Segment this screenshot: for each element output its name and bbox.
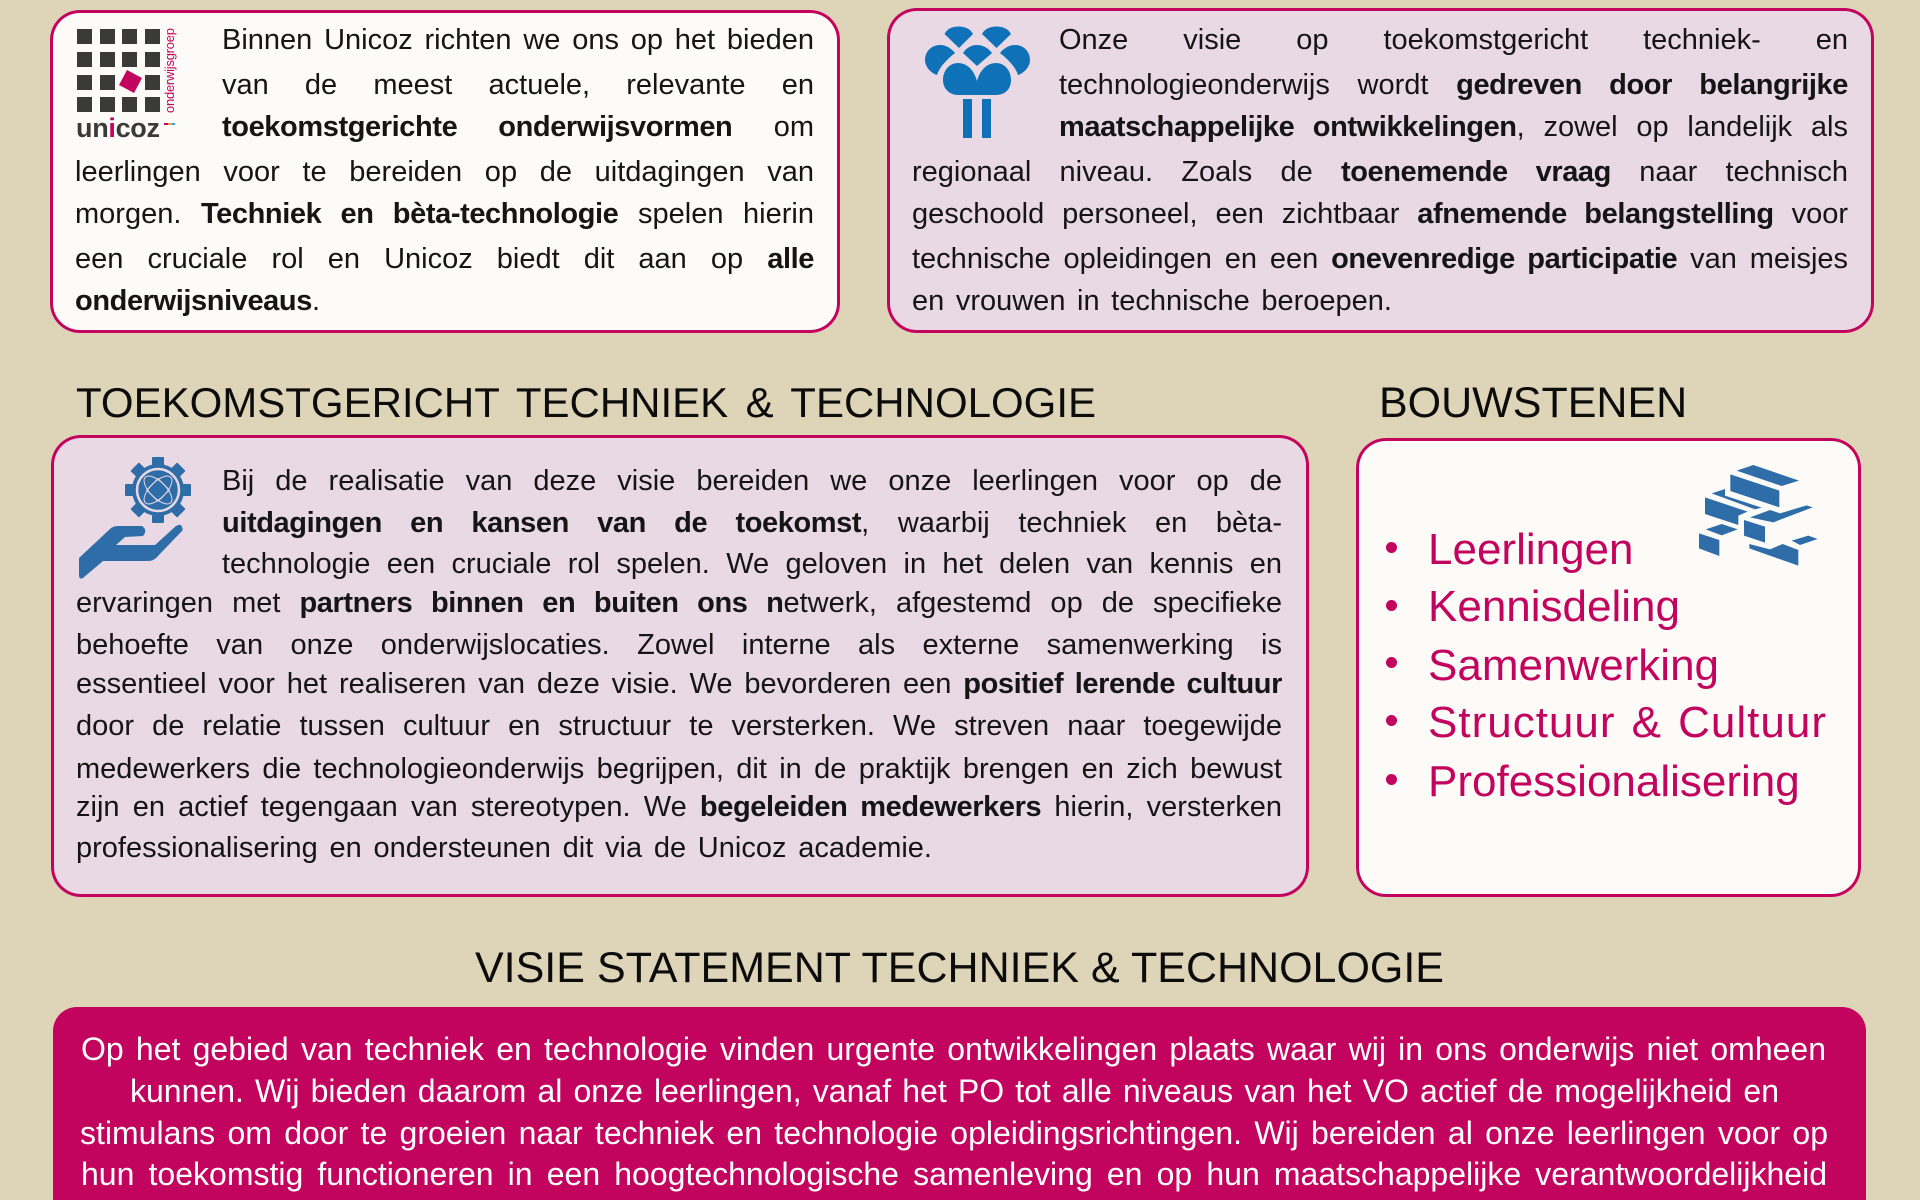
list item: Professionalisering [1428, 757, 1800, 806]
text line: maatschappelijke ontwikkelingen, zowel op landelijk als [1059, 111, 1848, 143]
bullet [1386, 774, 1397, 785]
text line: Op het gebied van techniek en technologie vinden urgente ontwikkelingen plaats waar wij in ons onderwijs niet omheen [81, 1031, 1826, 1067]
text line: Onze visie op toekomstgericht techniek- en [1059, 24, 1848, 56]
text line: technologie een cruciale rol spelen. We geloven in het delen van kennis en [222, 548, 1282, 580]
text line: Bij de realisatie van deze visie bereiden we onze leerlingen voor op de [222, 465, 1282, 497]
text line: stimulans om door te groeien naar techniek en technologie opleidingsrichtingen. Wij bereiden al onze leerlingen voor op [80, 1115, 1828, 1151]
text line: professionalisering en ondersteunen dit via de Unicoz academie. [76, 832, 932, 864]
text line: geschoold personeel, een zichtbaar afnemende belangstelling voor [912, 198, 1848, 230]
text line: uitdagingen en kansen van de toekomst, waarbij techniek en bèta- [222, 507, 1282, 539]
text line: Binnen Unicoz richten we ons op het bieden [222, 24, 814, 56]
icon: building blocks [1699, 465, 1818, 566]
text line: een cruciale rol en Unicoz biedt dit aan op alle [75, 243, 814, 275]
text line: en vrouwen in technische beroepen. [912, 285, 1392, 317]
list item: Structuur & Cultuur [1428, 698, 1827, 747]
text line: kunnen. Wij bieden daarom al onze leerlingen, vanaf het PO tot alle niveaus van het VO actief de mogelijkheid en [130, 1073, 1779, 1109]
text line: onderwijsniveaus. [75, 285, 320, 317]
text line: ervaringen met partners binnen en buiten ons netwerk, afgestemd op de specifieke [76, 587, 1282, 619]
icon: Unicoz logo: unicoz [76, 113, 160, 143]
bullet [1386, 542, 1397, 553]
icon: blue tree [925, 26, 1030, 138]
text line: essentieel voor het realiseren van deze visie. We bevorderen een positief lerende cultuur [76, 668, 1282, 700]
text line: hun toekomstig functioneren in een hoogtechnologische samenleving en op hun maatschappelijke verantwoordelijkheid [81, 1156, 1827, 1192]
text line: technologieonderwijs wordt gedreven door belangrijke [1059, 69, 1848, 101]
panel: Unicoz introduction [50, 10, 840, 333]
text line: toekomstgerichte onderwijsvormen om [222, 111, 814, 143]
panel: visie statement text [53, 1007, 1866, 1200]
text line: regionaal niveau. Zoals de toenemende vraag naar technisch [912, 156, 1848, 188]
icon: Unicoz logo: onderwijsgroep [162, 28, 177, 113]
heading: bouwstenen: BOUWSTENEN [1379, 379, 1687, 427]
text line: behoefte van onze onderwijslocaties. Zowel interne als externe samenwerking is [76, 629, 1282, 661]
icon: Unicoz logo [76, 28, 177, 143]
panel: bouwstenen list [1356, 438, 1861, 897]
text line: morgen. Techniek en bèta-technologie spelen hierin [75, 198, 814, 230]
text line: zijn en actief tegengaan van stereotypen. We begeleiden medewerkers hierin, versterken [76, 791, 1282, 823]
text line: van de meest actuele, relevante en [222, 69, 814, 101]
list item: Leerlingen [1428, 525, 1634, 574]
text line: door de relatie tussen cultuur en structuur te versterken. We streven naar toegewijde [76, 710, 1282, 742]
heading: visie statement: VISIE STATEMENT TECHNIEK & TECHNOLOGIE [475, 944, 1444, 992]
text line: medewerkers die technologieonderwijs begrijpen, dit in de praktijk brengen en zich bewust [76, 753, 1282, 785]
bullet [1386, 600, 1397, 611]
bullet [1386, 657, 1397, 668]
text line: leerlingen voor te bereiden op de uitdagingen van [75, 156, 814, 188]
list item: Samenwerking [1428, 641, 1717, 690]
text line: technische opleidingen en een onevenredige participatie van meisjes [912, 243, 1848, 275]
panel: vision and societal developments [887, 8, 1874, 333]
panel: toekomstgericht techniek text [51, 435, 1309, 897]
icon: hand holding gear [79, 457, 191, 579]
bullet [1386, 715, 1397, 726]
heading: toekomstgericht techniek en technologie: TOEKOMSTGERICHT TECHNIEK & TECHNOLOGIE [76, 379, 1096, 426]
list item: Kennisdeling [1428, 582, 1680, 631]
